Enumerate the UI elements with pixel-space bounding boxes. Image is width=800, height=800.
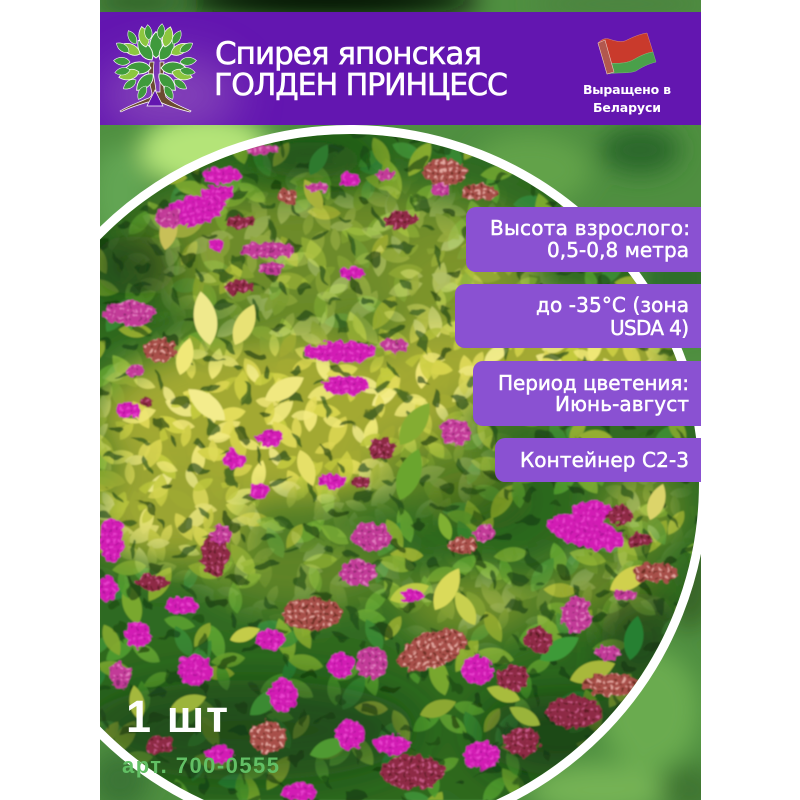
white ring around the photo	[100, 125, 701, 800]
callout: container size: Контейнер С2-3	[520, 448, 689, 472]
icon: tree logo	[113, 23, 197, 112]
callout: flowering period	[473, 361, 701, 426]
shadowed areas of the shrub	[80, 140, 680, 780]
callout: container size	[495, 438, 701, 482]
green foliage	[90, 120, 710, 800]
callout: frost hardiness: до -35°C (зона	[536, 293, 689, 317]
heading: plant name: Спирея японская	[215, 36, 482, 72]
callout: adult height: 0,5-0,8 метра	[547, 238, 689, 262]
callout: adult height	[466, 207, 701, 272]
callout: frost hardiness: USDA 4)	[610, 316, 689, 340]
header band	[100, 12, 701, 135]
large individual leaves	[127, 141, 671, 763]
callout: adult height: Высота взрослого:	[490, 216, 690, 240]
label: grown in Belarus	[583, 82, 671, 115]
callout: flowering period: Июнь-август	[555, 392, 689, 416]
heading: plant name: ГОЛДЕН ПРИНЦЕСС	[214, 68, 508, 103]
label: grown in Belarus: Беларуси	[593, 100, 661, 115]
callout: frost hardiness	[455, 284, 701, 348]
icon: flag of Belarus	[598, 33, 656, 74]
golden-yellow foliage	[100, 162, 698, 656]
shadow gaps between leaves	[100, 134, 698, 800]
flower clusters	[99, 145, 677, 800]
label: quantity: 1 шт	[126, 691, 228, 742]
background: blurred green photo	[90, 0, 720, 800]
heading: plant name	[214, 36, 508, 103]
photo: spirea shrub in a round frame	[100, 134, 699, 800]
label: article number: арт. 700-0555	[122, 753, 279, 778]
callout: flowering period: Период цветения:	[498, 371, 689, 395]
label: grown in Belarus: Выращено в	[583, 82, 671, 97]
